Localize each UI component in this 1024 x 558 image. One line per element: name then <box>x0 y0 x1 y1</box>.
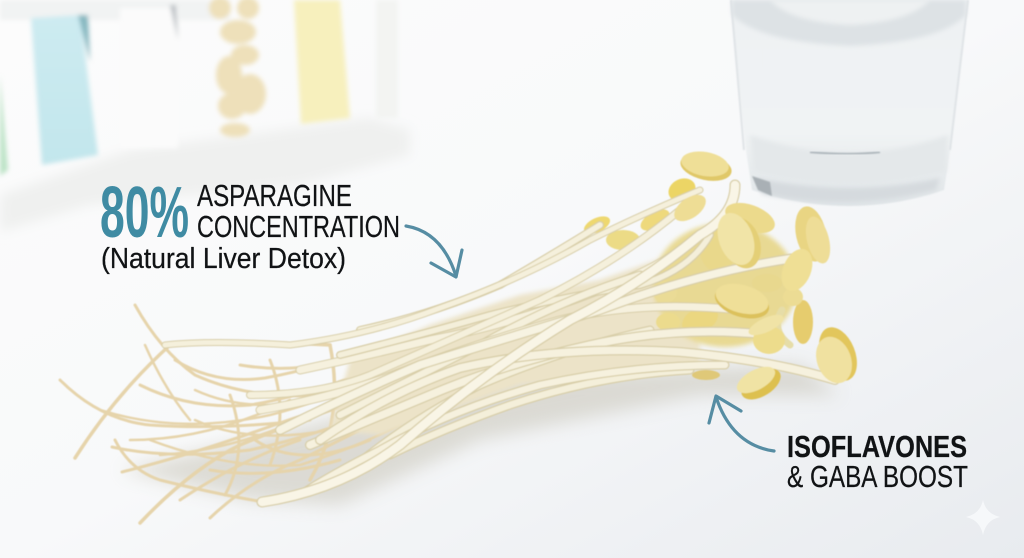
bean: right mid <box>776 244 818 296</box>
callout: isoflavones <box>787 429 968 494</box>
bean: far right <box>791 203 834 266</box>
big stat: 80%: 80% <box>100 173 189 253</box>
bean: centre large <box>711 208 767 273</box>
arrow: to stems <box>406 226 462 277</box>
test tube: yellow <box>294 0 350 124</box>
test tube: blue <box>31 15 98 165</box>
icon: sparkle watermark <box>966 500 1000 535</box>
rack post <box>376 0 398 118</box>
label: natural liver detox: (Natural Liver Detox) <box>101 243 346 275</box>
arrow: to beans <box>709 396 774 451</box>
bean sprouts <box>60 148 864 523</box>
label: gaba boost: & GABA BOOST <box>787 459 968 494</box>
test tube: green <box>0 75 8 176</box>
bean: far lower right <box>810 322 864 388</box>
stems <box>165 185 835 502</box>
bean: centre lower <box>711 278 773 325</box>
bean: bottom <box>733 361 786 406</box>
sprout shadow <box>120 365 840 505</box>
label: asparagine: ASPARAGINE <box>197 178 352 213</box>
test tube rack <box>0 0 410 232</box>
roots <box>60 305 400 523</box>
bean: lower cluster <box>746 311 786 354</box>
bean: top <box>678 148 734 185</box>
callout: asparagine <box>100 173 400 275</box>
label: isoflavones: ISOFLAVONES <box>787 429 967 464</box>
beans behind stems <box>581 174 813 380</box>
bean: upper right <box>721 197 779 239</box>
bean: small inner <box>670 189 710 227</box>
front beans <box>670 148 864 406</box>
test tube: beans <box>209 0 266 137</box>
water glass <box>730 0 968 206</box>
stem body fill <box>330 245 700 435</box>
label: concentration: CONCENTRATION <box>197 209 400 244</box>
